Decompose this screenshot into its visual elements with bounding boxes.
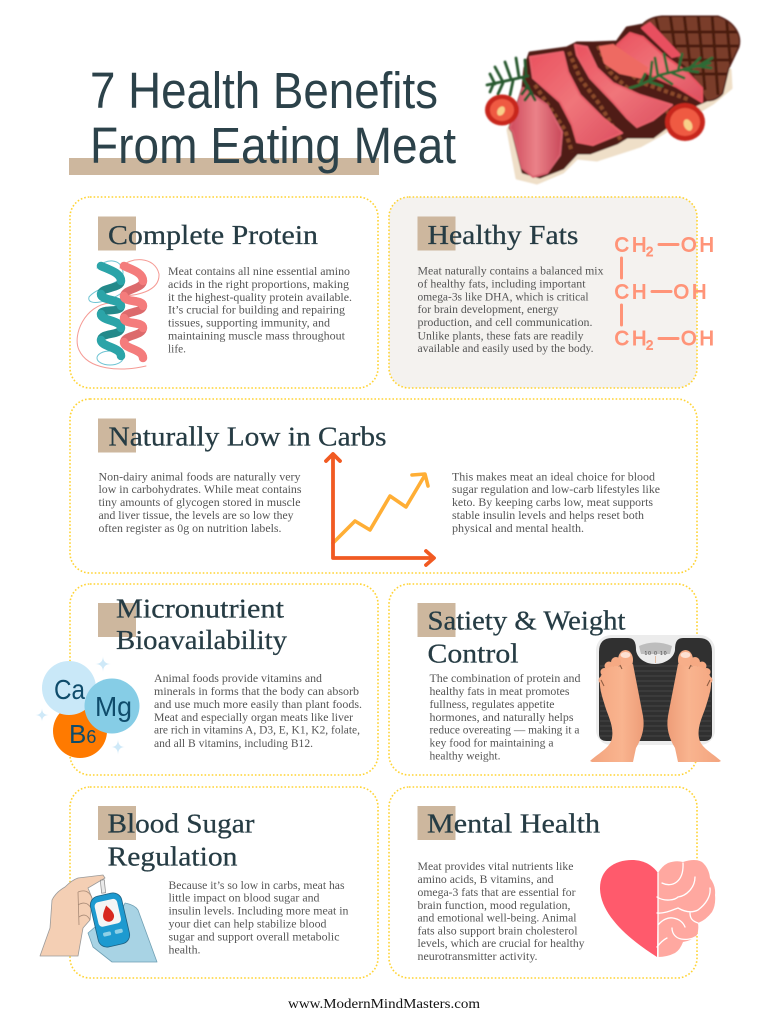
heading [428,606,626,668]
panel: healthy fats [389,197,717,388]
heading: Complete Protein [108,220,319,250]
text block: fullness, regulates appetite [430,698,554,711]
text block: tissues, supporting immunity, and [168,316,330,330]
text block: available and easily used by the body. [418,342,594,355]
heading: Bioavailability [116,625,288,655]
text block: are rich in vitamins A, D3, E, K1, K2, folate, [154,724,360,736]
text block: right [452,470,660,535]
panel: micronutrient bioavailability [35,584,378,775]
panel: complete protein [70,197,378,388]
text block: left [98,470,302,535]
icon: glycerol formula: 2 [646,338,656,352]
icon: feet on bathroom scale [590,635,721,762]
icon: mineral circles [35,656,140,758]
text block: right: sugar regulation and low-carb lifestyles like [452,483,660,496]
text block: right: stable insulin levels and helps reset both [452,509,644,522]
icon: heart and brain [600,860,715,957]
text block: your diet can help stabilize blood [168,918,327,930]
text block [418,264,604,355]
text block: neurotransmitter activity. [418,950,538,963]
text block: left: Non-dairy animal foods are naturally very [98,470,301,484]
icon: mineral circles: Ca [54,674,85,705]
heading: Micronutrient [116,594,285,624]
text block: Meat contains all nine essential amino [168,265,350,278]
heading: Healthy Fats [428,220,578,250]
icon: protein helix [77,260,159,369]
heading: Mental Health [427,808,601,838]
text block: omega-3 fats that are essential for [418,886,576,899]
text block: Meat naturally contains a balanced mix [418,264,604,278]
text block: brain function, mood regulation, [418,899,571,912]
text block: and all B vitamins, including B12. [154,737,313,750]
icon: mineral circles: Mg [95,691,132,722]
heading: Control [428,638,518,668]
text block: left: low in carbohydrates. While meat contains [98,483,302,496]
text block: right: physical and mental health. [452,522,584,535]
heading: Regulation [108,842,238,872]
text block: omega-3s like DHA, which is critical [418,290,588,304]
icon: glucose meter in hands [40,875,157,962]
text block: key food for maintaining a [430,736,554,750]
text block: and emotional well-being. Animal [418,912,576,924]
text block: Animal foods provide vitamins and [154,672,322,685]
icon: glycerol formula: CH [614,234,649,256]
text block: fats also support brain cholesterol [418,924,578,938]
heading: Satiety & Weight [428,606,626,636]
chart: rising line [326,454,434,565]
icon: glycerol formula: OH [681,328,717,350]
panel: mental health [389,787,715,978]
text block [430,672,581,762]
text block: life. [168,342,186,356]
text block [418,860,585,963]
text block: left: and liver tissue, the levels are so low they [98,509,294,522]
text block: little impact on blood sugar and [168,892,320,904]
heading [116,594,288,655]
icon: feet on bathroom scale: 10 0 10 [644,651,667,657]
icon: glycerol formula: OH [681,234,717,256]
text block: levels, which are crucial for healthy [418,937,585,950]
panel: blood sugar regulation [40,787,378,978]
text block: it the highest-quality protein available. [168,291,352,304]
icon: glycerol formula: CH [614,328,649,350]
icon: mineral circles: B6 [69,719,96,749]
text block: production, and cell communication. [418,316,593,329]
icon: glycerol formula: CH [614,282,649,304]
heading: Blood Sugar [108,808,254,838]
text block: for brain development, energy [418,303,559,316]
title: From Eating Meat [90,117,456,174]
text block [168,879,349,956]
text block: The combination of protein and [430,672,581,685]
text block: Because it’s so low in carbs, meat has [168,879,345,892]
text block: insulin levels. Including more meat in [168,904,349,918]
heading: Naturally Low in Carbs [108,422,386,452]
text block: minerals in forms that the body can absorb [154,685,359,698]
text block: Meat and especially organ meats like liver [154,711,353,724]
title: 7 Health Benefits [90,62,438,119]
text block: amino acids, B vitamins, and [418,873,554,886]
text block: healthy fats in meat promotes [430,685,570,698]
text block: of healthy fats, including important [418,278,586,290]
text block: right: keto. By keeping carbs low, meat supports [452,496,653,509]
icon: glycerol formula [614,234,717,352]
text block: maintaining muscle mass throughout [168,330,346,342]
heading [108,808,254,872]
text block: Unlike plants, these fats are readily [418,330,584,342]
text block: Meat provides vital nutrients like [418,860,574,873]
title [69,62,456,175]
text block: and use much more easily than plant foods. [154,698,362,711]
text block: hormones, and naturally helps [430,711,574,724]
text block: reduce overeating — making it a [430,724,580,736]
panel: naturally low in carbs [70,399,697,573]
text block: sugar and support overall metabolic [168,930,340,944]
text block [168,265,352,356]
text block: It’s crucial for building and repairing [168,304,345,316]
text block [154,672,362,750]
text block: healthy weight. [430,750,501,762]
text block: left: often register as 0g on nutrition labels. [98,522,282,535]
icon: glycerol formula: 2 [646,244,656,259]
illustration: sliced meat with tomatoes and rosemary [485,14,742,183]
text block: acids in the right proportions, making [168,278,349,291]
panel: satiety and weight control [389,584,721,775]
icon: glycerol formula: OH [674,282,710,304]
text block: left: tiny amounts of glycogen stored in muscle [98,496,300,509]
footer: website: www.ModernMindMasters.com [288,996,481,1011]
text block: health. [168,944,201,956]
text block: right: This makes meat an ideal choice for blood [452,470,655,484]
